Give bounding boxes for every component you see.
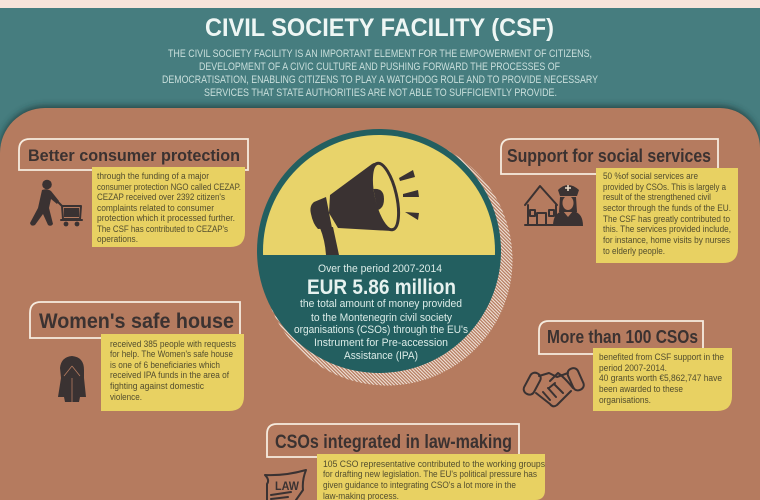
icon: law document: LAW — [275, 479, 300, 493]
icon: crouching woman — [58, 356, 86, 402]
card text: fighting against domestic — [110, 381, 204, 392]
heading frame — [267, 424, 519, 457]
funding text: Assistance (IPA) — [344, 350, 418, 362]
funding text: Instrument for Pre-accession — [314, 337, 448, 349]
card text: period 2007-2014. — [599, 363, 667, 374]
text card — [596, 168, 738, 263]
card text: received IPA funds in the area of — [110, 370, 229, 381]
heading frame — [501, 139, 718, 174]
card text: sector through the funds of the EU. — [603, 203, 731, 214]
heading: CSOs integrated in law-making — [275, 432, 512, 453]
funding text: to the Montenegrin civil society — [311, 312, 452, 324]
card text: for help. The Women's safe house — [110, 349, 233, 360]
card text — [97, 171, 241, 245]
card text: given guidance to integrating CSO's a lot more in the — [323, 480, 516, 491]
card text — [323, 459, 545, 500]
heading: Support for social services — [507, 146, 711, 166]
card text: CEZAP received over 2392 citizen's — [97, 192, 225, 203]
text card — [593, 348, 732, 411]
card text: violence. — [110, 392, 142, 403]
card text: The CSF has contributed to CEZAP's — [97, 224, 228, 235]
text card — [317, 454, 545, 500]
card text: to elderly people. — [603, 246, 665, 257]
card text: consumer protection NGO called CEZAP. — [97, 182, 241, 193]
card text: benefited from CSF support in the — [599, 352, 724, 363]
yellow upper part — [263, 135, 495, 255]
hatched circle shadow — [262, 134, 512, 386]
heading frame — [539, 321, 703, 354]
funding text: Over the period 2007-2014 — [318, 263, 442, 275]
card text — [110, 339, 236, 403]
card text: The CSF has greatly contributed to — [603, 214, 730, 225]
icon: person with shopping cart — [30, 180, 82, 226]
heading frame — [30, 302, 240, 338]
panel: support for social services — [501, 139, 738, 263]
card text: 50 %of social services are — [603, 171, 698, 182]
icon: house and nurse — [525, 185, 583, 226]
central circle — [257, 129, 512, 386]
card text: provided by CSOs. This is largely a — [603, 182, 727, 193]
title: CIVIL SOCIETY FACILITY (CSF) — [205, 14, 554, 42]
heading: Better consumer protection — [28, 146, 240, 165]
heading: Women's safe house — [39, 310, 234, 333]
intro text: THE CIVIL SOCIETY FACILITY IS AN IMPORTANT ELEMENT FOR THE EMPOWERMENT OF CITIZENS, — [168, 48, 592, 60]
funding text: EUR 5.86 million — [307, 276, 456, 299]
panel: better consumer protection — [19, 139, 248, 247]
card text: been awarded to these — [599, 384, 683, 395]
card text: result of the strengthened civil — [603, 192, 711, 203]
panel: more than 100 CSOs — [522, 321, 732, 411]
funding text: organisations (CSOs) through the EU's — [294, 324, 468, 336]
funding text — [294, 263, 468, 362]
card text: 105 CSO representative contributed to the working groups — [323, 459, 545, 470]
card text: complaints related to consumer — [97, 203, 215, 214]
card text: protection which it processed further. — [97, 213, 235, 224]
intro text: SERVICES THAT STATE AUTHORITIES ARE NOT ABLE TO SUFFICIENTLY PROVIDE. — [204, 87, 557, 99]
panel: CSOs integrated in law-making — [265, 424, 545, 500]
card text: organisations. — [599, 395, 651, 406]
funding text: the total amount of money provided — [300, 298, 462, 310]
card text: this. The services provided include, — [603, 224, 731, 235]
text card — [92, 167, 245, 247]
card text — [603, 171, 731, 257]
text card — [101, 334, 244, 411]
icon: megaphone — [310, 161, 419, 255]
brown main panel — [0, 106, 760, 500]
icon: handshake — [522, 367, 585, 406]
card text: for instance, home visits by nurses — [603, 235, 730, 246]
intro text: DEVELOPMENT OF A CIVIC CULTURE AND PUSHING FORWARD THE PROCESSES OF — [199, 61, 560, 73]
icon: law document — [265, 470, 306, 500]
card text: through the funding of a major — [97, 171, 210, 182]
heading: More than 100 CSOs — [547, 327, 698, 347]
card text: received 385 people with requests — [110, 339, 236, 350]
card text — [599, 352, 724, 406]
intro text — [162, 48, 599, 99]
top pink strip — [0, 0, 760, 8]
card text: operations. — [97, 234, 138, 245]
panel: women's safe house — [30, 302, 244, 411]
circle ring — [257, 129, 501, 373]
intro text: DEMOCRATISATION, ENABLING CITIZENS TO PLAY A WATCHDOG ROLE AND TO PROVIDE NECESSARY — [162, 74, 599, 86]
heading frame — [19, 139, 248, 170]
card text: for drafting new legislation. The EU's political pressure has — [323, 469, 537, 480]
card text: is one of 6 beneficiaries which — [110, 360, 220, 371]
header band — [0, 8, 760, 158]
card text: 40 grants worth €5,862,747 have — [599, 373, 722, 384]
